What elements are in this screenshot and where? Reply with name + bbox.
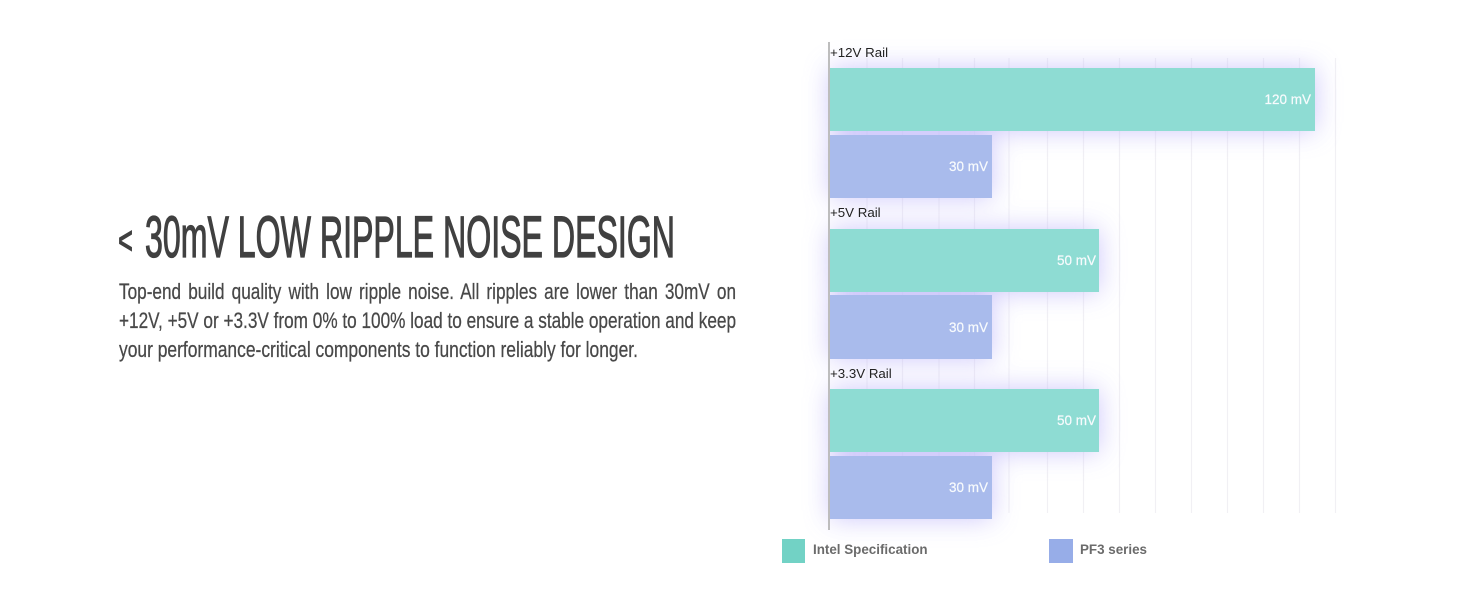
+3.3V rail group: +3.3V Rail [830, 366, 892, 381]
legend [782, 539, 1147, 563]
+12V rail group: 120 mV [1264, 92, 1311, 107]
+5V rail group: 30 mV [949, 320, 988, 335]
bar chart: ripple noise by rail [829, 42, 1336, 530]
heading: < [118, 219, 133, 263]
+12V rail group: +12V Rail [830, 45, 888, 60]
description text [119, 279, 736, 362]
+12V rail group [830, 45, 1315, 198]
+5V rail group: 50 mV [1057, 253, 1096, 268]
legend item: Intel Specification: Intel Specification [813, 542, 928, 557]
description text: +12V, +5V or +3.3V from 0% to 100% load to ensure a stable operation and keep [119, 308, 736, 333]
+12V rail group: 30 mV [949, 159, 988, 174]
description text: your performance-critical components to function reliably for longer. [119, 337, 638, 362]
legend item: Intel Specification [782, 539, 928, 563]
+5V rail group: +5V Rail [830, 205, 881, 220]
legend item: PF3 series: PF3 series [1080, 542, 1147, 557]
legend item: PF3 series [1049, 539, 1147, 563]
heading [118, 205, 675, 270]
description text: Top-end build quality with low ripple noise. All ripples are lower than 30mV on [119, 279, 736, 304]
+3.3V rail group [830, 366, 1099, 519]
+3.3V rail group: 50 mV [1057, 413, 1096, 428]
+5V rail group [830, 205, 1099, 359]
heading: 30mV LOW RIPPLE NOISE DESIGN [145, 205, 675, 270]
+3.3V rail group: 30 mV [949, 480, 988, 495]
